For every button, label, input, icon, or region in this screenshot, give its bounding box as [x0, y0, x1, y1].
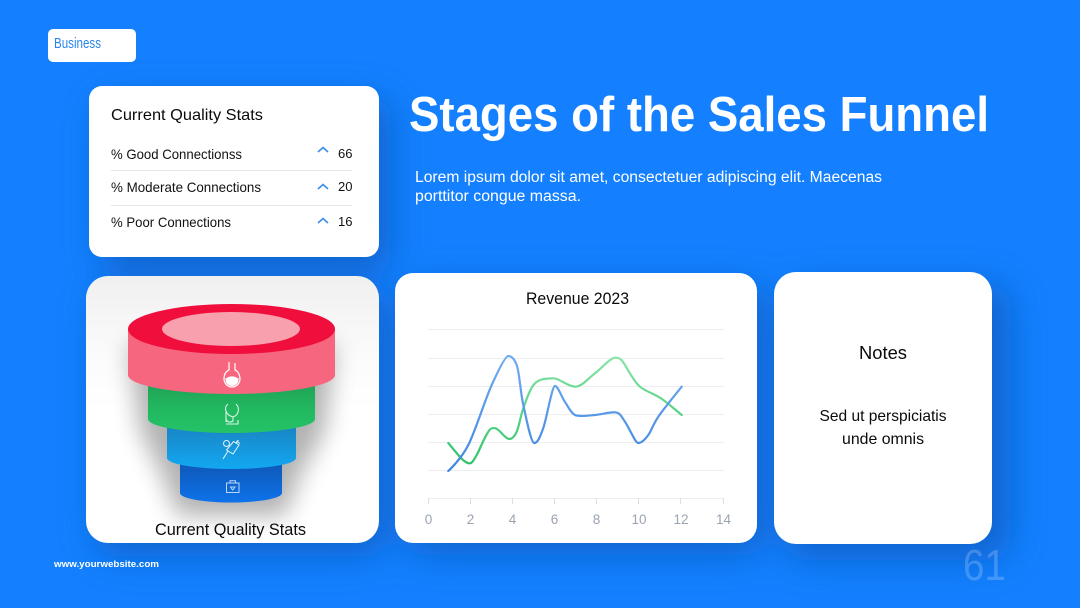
axis labels: 8 [593, 512, 600, 527]
panel: current quality stats [89, 86, 379, 257]
row: good connections: 66 [338, 146, 352, 161]
axis labels: 10 [631, 512, 647, 527]
series: green line [448, 358, 682, 463]
icon: stethoscope [226, 404, 238, 424]
row: good connections: % Good Connectionss [111, 146, 242, 162]
row: good connections [111, 146, 352, 162]
panel shadows [96, 100, 1010, 560]
funnel tier: blue [167, 420, 296, 469]
funnel shadow [128, 345, 335, 516]
panel: revenue chart [395, 273, 757, 543]
notes text [820, 408, 946, 448]
icon: medical case [226, 481, 239, 492]
row: moderate connections [111, 179, 352, 195]
funnel tier: dark blue [180, 455, 282, 502]
funnel tier: green [148, 380, 315, 433]
description: Lorem ipsum dolor sit amet, consectetuer adipiscing elit. Maecenas [415, 169, 882, 186]
icon: flask [224, 362, 240, 387]
row: moderate connections: 20 [338, 179, 352, 194]
axis labels: 2 [467, 512, 474, 527]
website url: www.yourwebsite.com [53, 559, 159, 570]
title: Stages of the Sales Funnel [409, 88, 989, 142]
funnel opening [162, 312, 300, 346]
tag: Business: Business [54, 35, 101, 52]
page number: 61 [963, 541, 1006, 590]
series: blue line [448, 356, 682, 471]
axis labels: 0 [425, 512, 432, 527]
row: moderate connections: % Moderate Connections [111, 179, 261, 195]
row: poor connections: % Poor Connections [111, 214, 231, 230]
row: poor connections: 16 [338, 214, 352, 229]
axis labels: 14 [716, 512, 731, 527]
notes heading: Notes [859, 343, 907, 363]
axis labels: 4 [509, 512, 517, 527]
notes text: Sed ut perspiciatis [820, 408, 946, 425]
funnel caption: Current Quality Stats [155, 521, 306, 539]
funnel tier: red [128, 304, 335, 394]
icon: syringe [223, 440, 240, 459]
axis labels: 12 [673, 512, 689, 527]
panel: notes [774, 272, 992, 544]
chart title: Revenue 2023 [526, 290, 629, 308]
stats heading: Current Quality Stats [111, 107, 263, 124]
notes text: unde omnis [842, 431, 924, 448]
description: porttitor congue massa. [415, 188, 581, 205]
axis labels: 6 [551, 512, 558, 527]
panel: funnel [86, 276, 379, 543]
tag: Business [48, 29, 136, 62]
row: poor connections [111, 214, 352, 230]
axis labels [425, 512, 731, 527]
description [415, 169, 882, 205]
